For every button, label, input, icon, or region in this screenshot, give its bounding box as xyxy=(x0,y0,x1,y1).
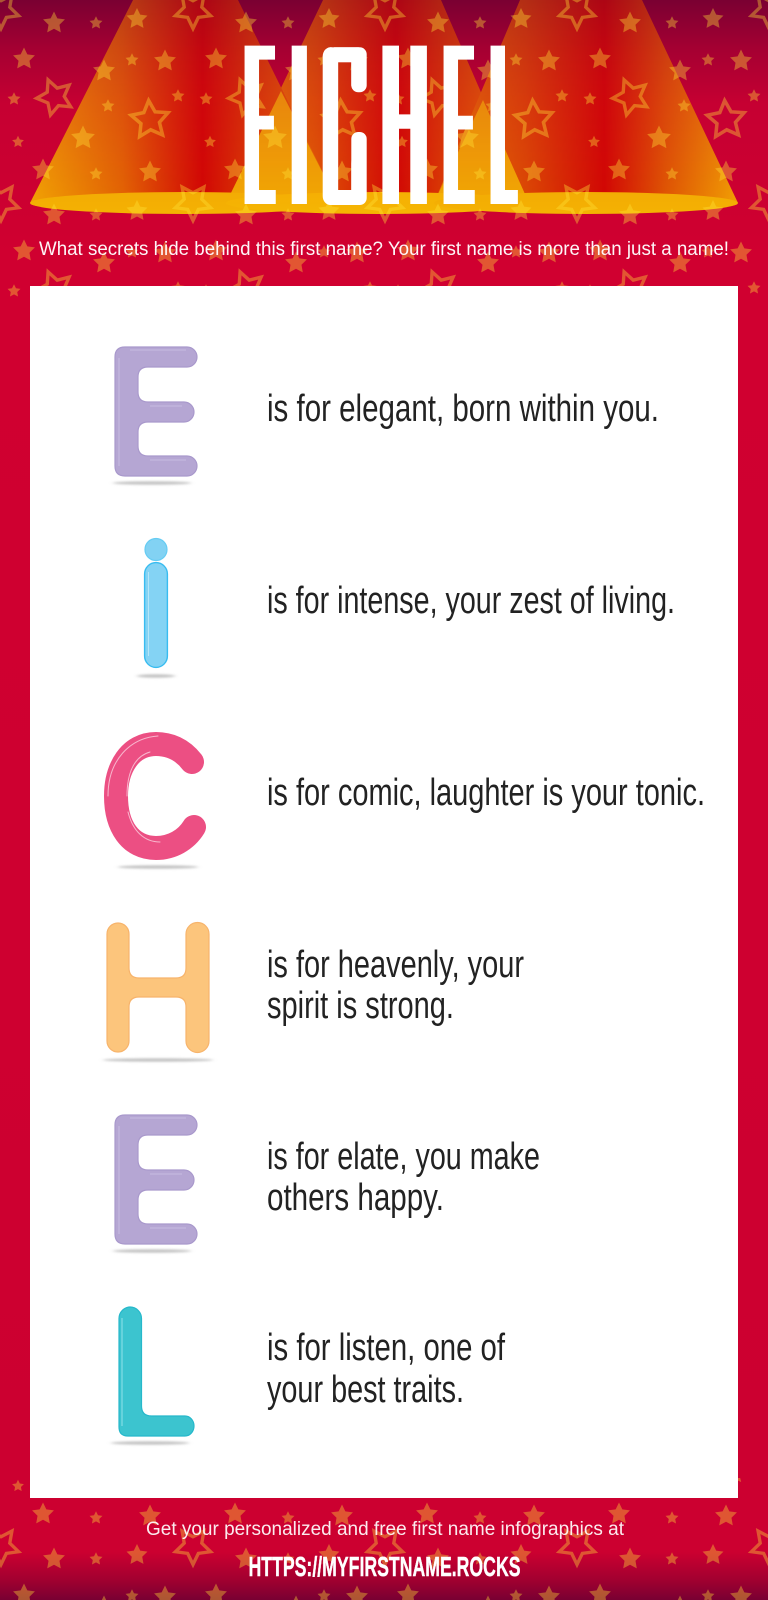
text: L line: is for listen, one of xyxy=(267,1327,505,1369)
text: H lines: spirit is strong. xyxy=(267,985,454,1027)
icon: purple letter E xyxy=(113,1115,197,1253)
subtitle: What secrets hide behind this first name? Your first name is more than just a name! xyxy=(39,239,729,260)
spotlights xyxy=(30,0,738,214)
icon: orange letter H xyxy=(103,922,213,1062)
text: E line: is for elegant, born within you. xyxy=(267,388,659,430)
letter row 3 xyxy=(108,736,705,869)
icon: purple letter E xyxy=(113,347,197,485)
footer text: Get your personalized and free first name infographics at xyxy=(146,1519,625,1540)
letter row 5 xyxy=(113,1115,540,1253)
spotlight pool: left xyxy=(30,192,281,214)
title: H xyxy=(383,0,426,257)
panel: white card xyxy=(30,286,738,1498)
spotlight overlap: left xyxy=(231,91,323,194)
letter row 2 xyxy=(137,538,675,678)
spotlight overlap: right xyxy=(438,100,524,195)
spotlight: left cone xyxy=(30,0,338,203)
title: I xyxy=(292,0,305,257)
text: E line: others happy. xyxy=(267,1177,444,1219)
icon: blue letter i xyxy=(137,538,175,678)
footer url: HTTPS://MYFIRSTNAME.ROCKS xyxy=(248,1551,520,1582)
title: E xyxy=(446,0,470,257)
letter row 4 xyxy=(103,922,524,1062)
text: H lines: is for heavenly, your xyxy=(267,944,524,986)
spotlight pool: centre xyxy=(282,192,482,214)
icon: teal letter L xyxy=(111,1307,194,1445)
spotlight: right cone xyxy=(434,0,738,203)
icon: pink letter C xyxy=(108,736,198,869)
letter row 6 xyxy=(111,1307,505,1445)
spotlight pool: right xyxy=(482,192,738,214)
title xyxy=(244,46,518,205)
text: E line: is for elate, you make xyxy=(267,1136,540,1178)
title: E xyxy=(247,0,271,257)
text: L line: your best traits. xyxy=(267,1369,464,1411)
spotlight: centre cone xyxy=(281,0,481,193)
title: C xyxy=(326,0,363,257)
letter row 1 xyxy=(113,347,659,485)
title: L xyxy=(493,0,513,257)
